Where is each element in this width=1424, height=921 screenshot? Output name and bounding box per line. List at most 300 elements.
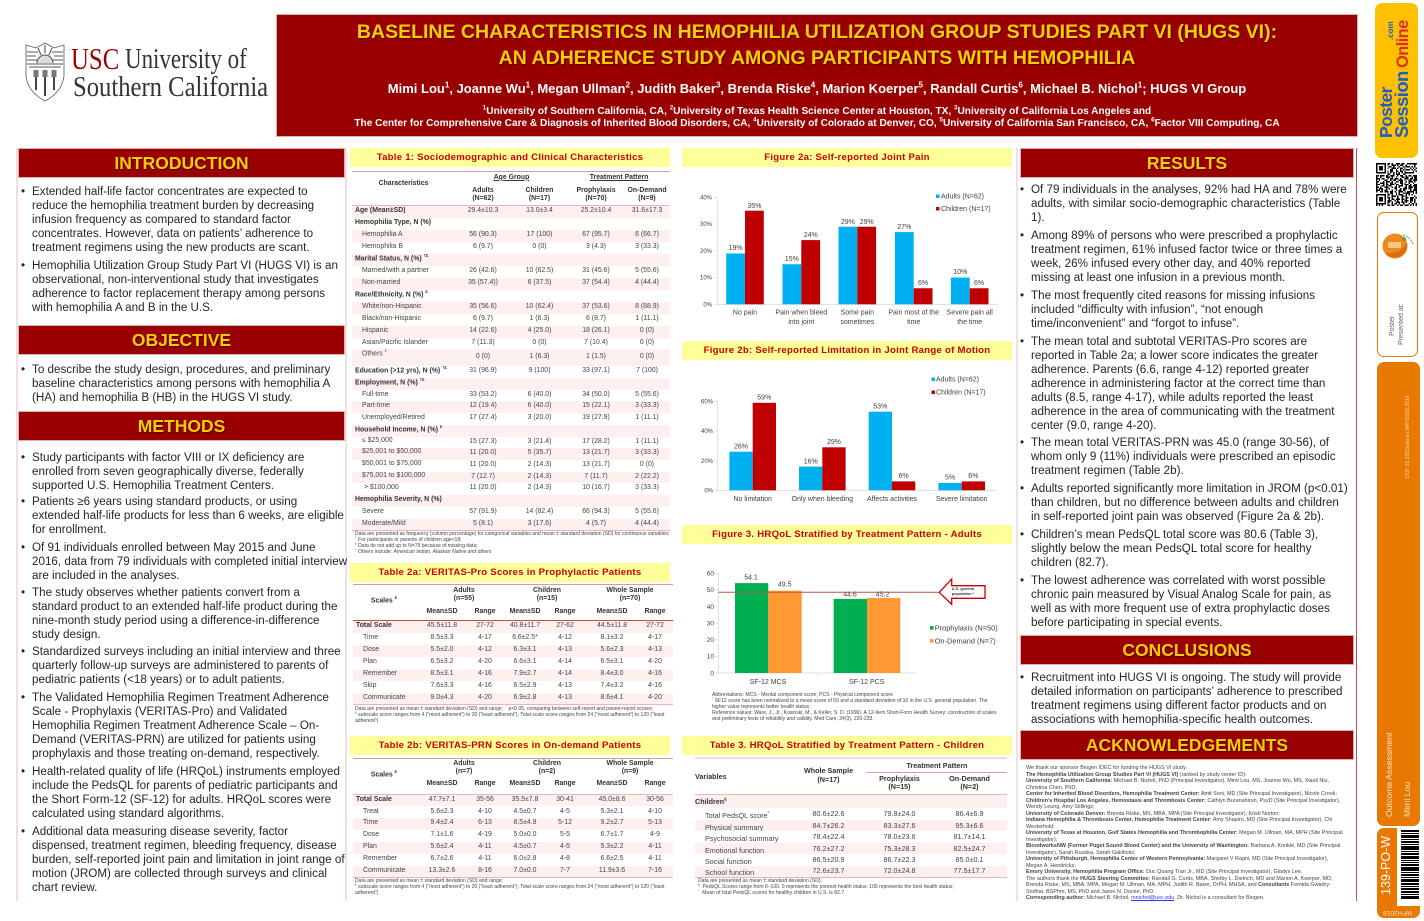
chart: HRQoL bars: 60 <box>707 570 714 578</box>
text: acknowledgements: Brenda Riske, MS, MBA, MPA, Megan M. Ullman, MA, MPH, Judith R. Baker, DrPH, MHSA, and Consultants Femida Gwadry- <box>1026 882 1331 888</box>
table 2b data: 45.0±8.6 <box>599 796 625 803</box>
table 1 data: 4 (25.0) <box>528 327 551 334</box>
title banner <box>276 14 1358 137</box>
text: results bullet 6: in self-reported joint pain was observed (Figure 2a & 2b). <box>1031 510 1324 523</box>
table 2a data: Range <box>474 608 496 615</box>
table 1 data: 3 (33.3) <box>635 243 659 250</box>
sidebar: presented at box <box>1377 212 1418 357</box>
table 1 data: 3 (21.4) <box>528 438 551 445</box>
text: acknowledgements: Investigator); <box>1026 836 1057 842</box>
table 3 data: Prophylaxis <box>879 774 920 783</box>
text: introduction bullet 2: adherence to factor replacement therapy among persons <box>32 287 325 300</box>
table 2a data: 4-17 <box>648 634 662 641</box>
arrow: U.S. general population reference: population * <box>952 591 975 596</box>
heading: acknowledgements: ACKNOWLEDGEMENTS <box>1086 735 1288 755</box>
table 1 data: 0 (0) <box>640 327 654 334</box>
text: results bullet 6: Adults reported significantly more limitation in JROM (p<0.01) <box>1031 482 1348 495</box>
table 2a data: 7.9±2.7 <box>514 670 536 677</box>
table 2b data: 5.3±2.2 <box>601 843 623 850</box>
badge text: .com: .com <box>1386 21 1395 40</box>
heading: methods <box>18 411 345 441</box>
table 1 data: $25,001 to $50,000 <box>362 448 421 455</box>
heading: table 2a: Table 2a: VERITAS-Pro Scores in Prophylactic Patients <box>379 567 641 578</box>
table 2b data: Whole Sample <box>606 760 654 767</box>
table 2a data: 27-72 <box>476 622 494 629</box>
text: methods bullet 3 <box>32 541 347 583</box>
text: methods bullet 7: calculated using standard algorithms. <box>32 807 224 820</box>
table 2a footnotes <box>355 704 664 724</box>
table 3 footnotes: ^ Mean of total PedsQL scores for healthy children in U.S. is 82.7 <box>698 889 844 896</box>
table 2a data: 8.4±3.0 <box>601 670 623 677</box>
table 2b data: 9.2±2.7 <box>601 819 623 826</box>
table 1 data: 17 (100) <box>527 231 552 238</box>
icon: barcode <box>1397 828 1420 906</box>
heading: figure 3 <box>682 525 1012 544</box>
panel: results <box>1020 148 1354 629</box>
chart: HRQoL bars: 40 <box>707 604 714 611</box>
table 2a data: 4-13 <box>648 646 662 653</box>
text: results bullet 4: adults (8.5, range 4-17), while adults reported the least <box>1031 391 1313 404</box>
chart: joint pain bars: Children (N=17) <box>941 206 991 213</box>
table 2b data: Range <box>644 780 666 787</box>
table 3 data: Variables <box>695 772 727 781</box>
text: methods bullet 6: Demand (VERITAS-PRN) are utilized for patients using <box>32 733 316 746</box>
table 2b footnotes: Data are presented as mean ± standard deviation (SD) and range; <box>355 878 503 884</box>
heading: acknowledgements <box>1020 730 1354 760</box>
text: methods bullet 5 <box>32 645 341 687</box>
table 1 data: (N=17) <box>529 195 550 202</box>
text: introduction bullet 2 <box>32 259 338 315</box>
table 1 data: 3 (33.3) <box>635 402 659 409</box>
text: acknowledgements: Christina Chen, PhD; <box>1026 784 1077 790</box>
chart: HRQoL bars: SF-12 MCS <box>750 679 787 686</box>
table 2b data: 4.5±0.7 <box>514 808 536 815</box>
heading: table 2a <box>350 563 670 582</box>
table 1 data: (N=9) <box>638 195 656 202</box>
chart: HRQoL bars: 0 <box>710 670 714 677</box>
table 2b data: 4-5 <box>560 808 570 815</box>
chart: joint pain bars: 19% <box>729 245 743 252</box>
table 2b data: Mean±SD <box>427 780 457 787</box>
arrow: U.S. general population reference <box>939 579 985 604</box>
table 1 data: 0 (0) <box>640 461 654 468</box>
chart: HRQoL bars: 50 <box>707 587 714 594</box>
chart: HRQoL bars: 45.2 <box>876 592 890 598</box>
table 2a data: Mean±SD <box>510 608 540 615</box>
table 2a data: 4-12 <box>558 634 572 641</box>
text: results bullet 3: time/inconvenient” and “forgot to infuse”. <box>1031 317 1239 330</box>
text: acknowledgements: We thank our sponsor Biogen IDEC for funding the HUGS VI study. <box>1026 765 1187 771</box>
heading: introduction: INTRODUCTION <box>114 153 249 173</box>
heading: table 1 <box>350 148 670 166</box>
table 1 data: 56 (90.3) <box>469 231 497 238</box>
table 2b data: 6.0±2.8 <box>514 855 536 862</box>
chart: joint pain bars: 27% <box>897 224 911 231</box>
logo: USC University of Southern California <box>26 41 268 103</box>
chart: joint range of motion bars: 26% <box>734 444 748 450</box>
table 1 data: 7 (100) <box>636 367 658 374</box>
table 1 data: Hemophilia B <box>362 243 403 250</box>
icon: USC shield <box>26 42 64 102</box>
text: results bullet 4: adherence in administering factor at the correct time than <box>1031 377 1325 390</box>
authors: Mimi Lou1, Joanne Wu1, Megan Ullman2, Judith Baker3, Brenda Riske4, Marion Koerper5, Randall Curtis6, Michael B. Nichol1; HUGS VI Group <box>388 81 1246 96</box>
table 2b data: 5-12 <box>558 819 572 826</box>
table 2a data: Dose <box>363 646 379 653</box>
text: conference code: WFH2016 <box>1383 909 1412 916</box>
table 1 data: 6 (8.7) <box>586 315 606 322</box>
table 1 data: 57 (91.9) <box>469 508 497 515</box>
chart: joint pain bars: 0% <box>703 302 713 308</box>
table 1 data: 14 (22.6) <box>469 327 497 334</box>
table 3 data: Whole Sample <box>804 766 853 775</box>
table 2a data: 27-72 <box>646 622 664 629</box>
chart: joint pain bars: 29% <box>860 219 874 226</box>
chart: joint range of motion bars: 5% <box>945 474 955 482</box>
table 3 data: 95.3±6.6 <box>956 821 983 830</box>
table 2b data: 4-19 <box>478 831 492 838</box>
chart: joint range of motion bars: Affects activities <box>867 496 918 503</box>
table 2a data: (n=70) <box>620 595 640 602</box>
table 2a data: 4-17 <box>478 634 492 641</box>
heading: introduction <box>18 148 345 178</box>
table 2b data: 11.9±3.6 <box>599 867 625 874</box>
chart: joint pain bars: Some pain <box>841 310 874 316</box>
table 3 data: (N=15) <box>888 782 911 791</box>
table 1 data: Non-married <box>362 279 400 286</box>
chart: joint pain bars: 40% <box>700 196 713 202</box>
table 2b data: Treat <box>363 808 379 815</box>
table 1 data: Hemophilia Type, N (%) <box>355 219 431 226</box>
chart: joint range of motion bars: No limitation <box>733 496 772 503</box>
text: conclusions bullet: detailed information on participants’ adherence to prescribed <box>1031 685 1342 698</box>
table 2a data: 5.6±2.3 <box>601 646 623 653</box>
table 1 data: 11 (20.0) <box>469 461 497 468</box>
chart: HRQoL bars: 20 <box>707 637 714 644</box>
table 1 data: Treatment Pattern <box>590 174 648 181</box>
table 2a data: 4-20 <box>648 694 662 701</box>
table 1 data: 1 (1.5) <box>586 353 606 360</box>
text: introduction bullet 1: concentrates. However, data on patients’ adherence to <box>32 227 313 240</box>
text: methods bullet 7: include the PedsQL for parents of pediatric participants and <box>32 779 338 792</box>
table 1 data: 1 (6.3) <box>530 353 549 360</box>
text: introduction bullet 2: observational, non-interventional study that investigates <box>32 273 319 286</box>
table 2a data: 9.0±4.3 <box>431 694 453 701</box>
table 2a data: 4-20 <box>648 658 662 665</box>
table 1 data: 34 (50.0) <box>582 391 610 398</box>
table 1 data: 1 (11.1) <box>635 414 659 421</box>
table 1 data: Hemophilia Severity, N (%) <box>355 496 442 503</box>
panel: table 3 <box>682 736 1012 896</box>
text: acknowledgements: Megan A. Hendricks; <box>1026 862 1076 868</box>
text: methods bullet 2: extended half-life products for less than 6 weeks, are eligible <box>32 509 344 522</box>
text: methods bullet 1: Study participants with factor VIII or IX deficiency are <box>32 451 304 464</box>
table 1 data: 31 (45.6) <box>582 267 610 274</box>
text: methods bullet 7: Health-related quality of life (HRQoL) instruments employed <box>32 765 340 778</box>
table 2b data: 4-11 <box>648 855 662 862</box>
chart: HRQoL bars: 49.5 <box>778 582 792 588</box>
table 2a data: 6.5±3.2 <box>431 658 453 665</box>
table 1 data: 29.4±10.3 <box>468 207 498 214</box>
table 2a data: 27-62 <box>556 622 574 629</box>
table 2a data: 4-13 <box>558 646 572 653</box>
table 2b data: 5.0±0.0 <box>514 831 536 838</box>
heading: table 3 <box>682 736 1012 754</box>
table 2b data: 6.7±2.6 <box>431 855 453 862</box>
table 1 data: 0 (0) <box>640 339 654 346</box>
text: objective bullet: To describe the study design, procedures, and preliminary <box>32 363 330 376</box>
text: methods bullet 2: Patients ≥6 years using standard products, or using <box>32 495 297 508</box>
table 2b data: 30-56 <box>646 796 664 803</box>
table 1 data: 10 (62.4) <box>526 303 553 310</box>
table 2b data: Communicate <box>363 867 406 874</box>
table 1 data: > $100,000 <box>364 484 399 491</box>
table 1 data: 9 (100) <box>529 367 550 374</box>
table 1 data: Prophylaxis <box>576 187 616 194</box>
table 2b footnotes: £ subscale score ranges from 4 (“most adherent”) to 20 (“least adherent”); Total scale score ranges from 24 (“most adherent”) to 120 (“least <box>355 883 664 890</box>
text: methods bullet 5: quarterly follow-up surveys are administered to parents of <box>32 659 328 672</box>
table 1 data: 1 (6.3) <box>530 315 549 322</box>
table 1 data: 8 (88.9) <box>635 303 659 310</box>
table 2b data: 4-8 <box>560 855 570 862</box>
table 1 data: 3 (20.0) <box>528 414 551 421</box>
table 1 data: Severe <box>362 508 384 515</box>
table 2b data: Total Scale <box>356 796 392 803</box>
chart: joint pain bars: time <box>907 319 920 326</box>
table 1 data: Full-time <box>362 391 388 398</box>
table 1 data: On-Demand <box>627 187 667 194</box>
text: results bullet 8: before participating in special events. <box>1031 616 1223 629</box>
table 1 data: 1 (11.1) <box>635 315 659 322</box>
table 3 data: 83.3±27.6 <box>884 821 915 830</box>
heading: table 3: Table 3. HRQoL Stratified by Treatment Pattern - Children <box>710 740 984 751</box>
chart: joint range of motion bars: Severe limitation <box>936 496 988 503</box>
table 1 data: 7 (11.7) <box>584 473 608 480</box>
table 1 data: 6 (40.0) <box>528 391 551 398</box>
text: methods bullet 6: Hemophilia Regimen Treatment Adherence Scale – On- <box>32 719 319 732</box>
table 1 data: 6 (66.7) <box>635 231 659 238</box>
heading: results <box>1020 148 1354 178</box>
table 1 data: 4 (44.4) <box>635 279 659 286</box>
table 1 data: 17 (27.4) <box>469 414 497 421</box>
chart: joint pain bars: 30% <box>700 222 713 228</box>
text: conclusions bullet: associations with hemophilia-specific health outcomes. <box>1031 713 1313 726</box>
panel: introduction <box>18 148 345 314</box>
table 2a data: 40.8±11.7 <box>510 622 540 629</box>
table 2b data: 47.7±7.1 <box>429 796 455 803</box>
text: results bullet 5: treatment regimen (Table 2b). <box>1031 464 1184 477</box>
table 1 data: 0 (0) <box>532 339 547 346</box>
table 3 data: 86.4±6.9 <box>956 809 983 818</box>
text: Presented at: Presented at: <box>1398 303 1405 345</box>
chart: joint range of motion bars: Only when bleeding <box>792 496 853 503</box>
table 3 footnotes <box>698 878 954 896</box>
table 2b data: (n=2) <box>539 768 555 775</box>
table 2a data: 4-16 <box>648 670 662 677</box>
table 2b data: 8-16 <box>478 867 492 874</box>
table 1 data: 33 (97.1) <box>582 367 610 374</box>
table 2a data: 4-16 <box>478 670 492 677</box>
chart: HRQoL bars <box>706 570 998 686</box>
text: results bullet 5: whom only 9 (11%) individuals were prescribed an episodic <box>1031 450 1336 463</box>
table 2b footnotes: adherent”) <box>355 890 378 896</box>
text: methods bullet 5: Standardized surveys including an initial interview and three <box>32 645 341 658</box>
panel: figure 2b <box>682 341 1012 503</box>
badge text: Session: Session <box>1391 71 1412 138</box>
title: AN ADHERENCE STUDY AMONG PARTICIPANTS WITH HEMOPHILIA <box>499 47 1135 69</box>
chart: joint pain bars: 29% <box>841 219 855 226</box>
panel: table 2a <box>350 563 673 724</box>
text: acknowledgements: Corresponding author: Michael B. Nichol, mnichol@usc.edu. Dr. Nichol is a consultant for Biogen. <box>1026 895 1264 901</box>
text: methods bullet 8: Additional data measuring disease severity, factor <box>32 825 288 838</box>
table 2a data: 6.6±3.1 <box>514 658 536 665</box>
chart: HRQoL bars: 54.1 <box>744 574 758 582</box>
heading: figure 2a: Figure 2a: Self-reported Joint Pain <box>764 152 930 163</box>
figure 3 footnotes: and preliminary tests of reliability and validity. Med Care, 34(3), 220-233. <box>712 716 874 722</box>
text: results bullet 6: than children, but no difference between adults and children <box>1031 496 1339 509</box>
text: results bullet 2: missing at least one infusion in a previous month. <box>1031 271 1285 284</box>
text: results bullet 7: slightly below the mean PedsQL total score for healthy <box>1031 542 1311 555</box>
text: results bullet 5 <box>1031 436 1336 478</box>
table 1 data: ≤ $25,000 <box>362 437 393 444</box>
text: results bullet 5: The mean total VERITAS-PRN was 45.0 (range 30-56), of <box>1031 436 1329 449</box>
table 2b data: Adults <box>453 760 475 767</box>
table 2b data: 4-11 <box>478 843 492 850</box>
table 1 data: Characteristics <box>379 180 428 187</box>
chart: joint pain bars: No pain <box>733 310 757 316</box>
title <box>357 21 1277 69</box>
table 3 data: 77.5±17.7 <box>954 866 985 875</box>
table 3 data: (N=2) <box>960 782 979 791</box>
table 3 data: 76.2±27.2 <box>813 844 844 853</box>
chart: joint pain bars: 6% <box>918 280 928 287</box>
chart: joint pain bars: Adults (N=62) <box>941 194 984 200</box>
table 2b data: 7-7 <box>560 867 570 874</box>
table 2a data: Whole Sample <box>606 587 654 594</box>
panel: table 1 <box>350 148 670 555</box>
table 2a data: 4-16 <box>478 682 492 689</box>
table 2a data: 7.6±3.3 <box>431 682 453 689</box>
panel: objective <box>18 325 345 404</box>
text: results bullet 8: The lowest adherence was correlated with worst possible <box>1031 574 1325 587</box>
table 1 data: 10 (62.5) <box>526 267 553 274</box>
text: acknowledgements: The authors thank the HUGS Steering Committee: Randall G. Curtis, MBA, Shelby L. Dietrich, MD and Marion A. Koerper, MD, <box>1026 876 1332 882</box>
text: methods bullet 8 <box>32 825 345 895</box>
chart: HRQoL bars: Prophylaxis (N=50) <box>935 623 998 632</box>
text: methods bullet 4: study design. <box>32 628 101 641</box>
text: conclusions bullet <box>1031 671 1342 727</box>
table 2b data: 6.6±2.5 <box>601 855 623 862</box>
table 1 data: $75,001 to $100,000 <box>362 472 425 479</box>
panel: methods <box>18 411 348 894</box>
table 2a data: 4-14 <box>558 658 572 665</box>
text: methods bullet 3: Of 91 individuals enrolled between May 2015 and June <box>32 541 315 554</box>
table 1 data: 5 (35.7) <box>528 449 551 456</box>
panel: conclusions <box>1020 635 1354 726</box>
table 2b data <box>353 758 673 878</box>
table 1 footnotes: £ Data do not add up to N=79 because of missing data; <box>355 541 478 549</box>
table 1 data: 7 (11.3) <box>471 339 495 346</box>
table 2a footnotes: £ subscale score ranges from 4 (“most adherent”) to 20 (“least adherent”); Total scale score ranges from 24 (“most adherent”) to 120 (“least <box>355 711 664 718</box>
table 2b data: 4-10 <box>648 808 662 815</box>
table 2b data: (n=7) <box>456 768 472 775</box>
text: acknowledgements: University of Pittsburgh, Hemophilia Center of Western Pennsylvania: Margaret V Ragni, MD (Site Principal Investigator), <box>1026 856 1328 862</box>
table 2a data: 6.9±2.8 <box>514 694 536 701</box>
table 2b data: 5.6±2.4 <box>431 843 453 850</box>
text: Poster: Poster <box>1389 316 1396 336</box>
table 1 data: 37 (54.4) <box>582 279 610 286</box>
table 2b data: 8.5±4.9 <box>514 819 536 826</box>
table 1 data: Married/with a partner <box>362 267 429 274</box>
table 1 footnotes <box>355 531 669 555</box>
table 1 data: 33 (53.2) <box>469 391 497 398</box>
text: conclusions bullet: Recruitment into HUGS VI is ongoing. The study will provide <box>1031 671 1341 684</box>
panel: figure 2a <box>682 148 1012 326</box>
table 3 data: 75.3±28.3 <box>884 844 915 853</box>
table 2b data: Dose <box>363 831 379 838</box>
table 1 data: Children <box>526 187 553 194</box>
table 1 data: 25.2±10.4 <box>581 207 611 214</box>
table 1 data: 5 (55.6) <box>635 391 659 398</box>
text: results bullet 4: The mean total and subtotal VERITAS-Pro scores are <box>1031 335 1307 348</box>
text: acknowledgements: Indiana Hemophilia & Thrombosis Center, Hemophilia Treatment Center: Amy Shapiro, MD (Site Principal Investigator), Chi <box>1026 817 1332 823</box>
text: results bullet 8: well as with more frequent use of extra prophylactic doses <box>1031 602 1330 615</box>
table 2a data: Skip <box>363 682 376 689</box>
text: results bullet 6 <box>1031 482 1348 524</box>
table 1 data: Moderate/Mild <box>362 520 406 527</box>
text: acknowledgements: Investigator), Sarah Ruuska, Sarah Gaklticks; <box>1026 850 1135 856</box>
table 3 data: (N=17) <box>817 775 840 784</box>
table 1 data: 5 (8.1) <box>473 520 493 527</box>
table 1 data: 5 (55.6) <box>635 508 659 515</box>
table 1 data: 10 (16.7) <box>582 484 610 491</box>
table 2b data: 6.7±1.7 <box>601 831 623 838</box>
table 2a data: Communicate <box>363 694 406 701</box>
table 2a data: 8.1±3.2 <box>601 634 623 641</box>
table 1 data: (N=70) <box>585 195 607 202</box>
table 1 data: 14 (82.4) <box>526 508 553 515</box>
table 1 data: 7 (12.7) <box>471 473 495 480</box>
table 3 data: 85.0±0.1 <box>956 855 983 864</box>
table 1 footnotes: Data are presented as frequency (column percentage) for categorical variables and mean ± standard deviation (SD) for continuous variables; <box>355 531 669 537</box>
sidebar: PosterSessionOnline badge <box>1375 3 1418 158</box>
text: acknowledgements: The Hemophilia Utilization Group Studies Part VI (HUGS VI) (ranked by study center ID): <box>1026 772 1247 778</box>
sidebar: orange category box <box>1377 362 1420 826</box>
text: methods bullet 2 <box>32 495 344 537</box>
table 2a data: 6.5±3.1 <box>601 658 623 665</box>
table 1 footnotes: ‡ Others include: American Indian, Alaskan Native and others <box>355 547 492 555</box>
table 2b data: Scales £ <box>371 769 397 778</box>
table 3 data: 78.4±22.4 <box>813 832 844 841</box>
table 1 data <box>352 171 670 530</box>
text: introduction bullet 2: Hemophilia Utilization Group Study Part VI (HUGS VI) is an <box>32 259 338 272</box>
affiliations: 1University of Southern California, CA, 2University of Texas Health Science Center at Houston, TX, 3University of California Los Angeles and <box>483 105 1151 117</box>
table 1 data: 18 (26.1) <box>582 327 610 334</box>
table 1 data: Adults <box>472 187 494 194</box>
badge text: Online: Online <box>1394 20 1412 68</box>
chart: joint pain bars: 15% <box>785 256 799 263</box>
table 2b data: 35.5±7.8 <box>512 796 538 803</box>
text: introduction bullet 2: with hemophilia A and B in the U.S. <box>32 301 213 314</box>
text: acknowledgements: Wendy Leung, Amy Stillings; <box>1026 804 1094 810</box>
text: acknowledgements: Emory University, Hemophilia Program Office: Duc Quang Tran Jr., MD (Site Principal Investigator), Gladys Lee. <box>1026 869 1302 875</box>
chart: joint range of motion bars: 59% <box>757 394 771 402</box>
table 2a data: Mean±SD <box>597 608 628 615</box>
text: results bullet 7 <box>1031 528 1318 570</box>
table 2a data: Total Scale <box>356 622 392 629</box>
table 2a data: Plan <box>363 658 377 665</box>
table 1 data: 3 (33.3) <box>635 449 659 456</box>
table 1 data: 6 (9.7) <box>473 315 493 322</box>
